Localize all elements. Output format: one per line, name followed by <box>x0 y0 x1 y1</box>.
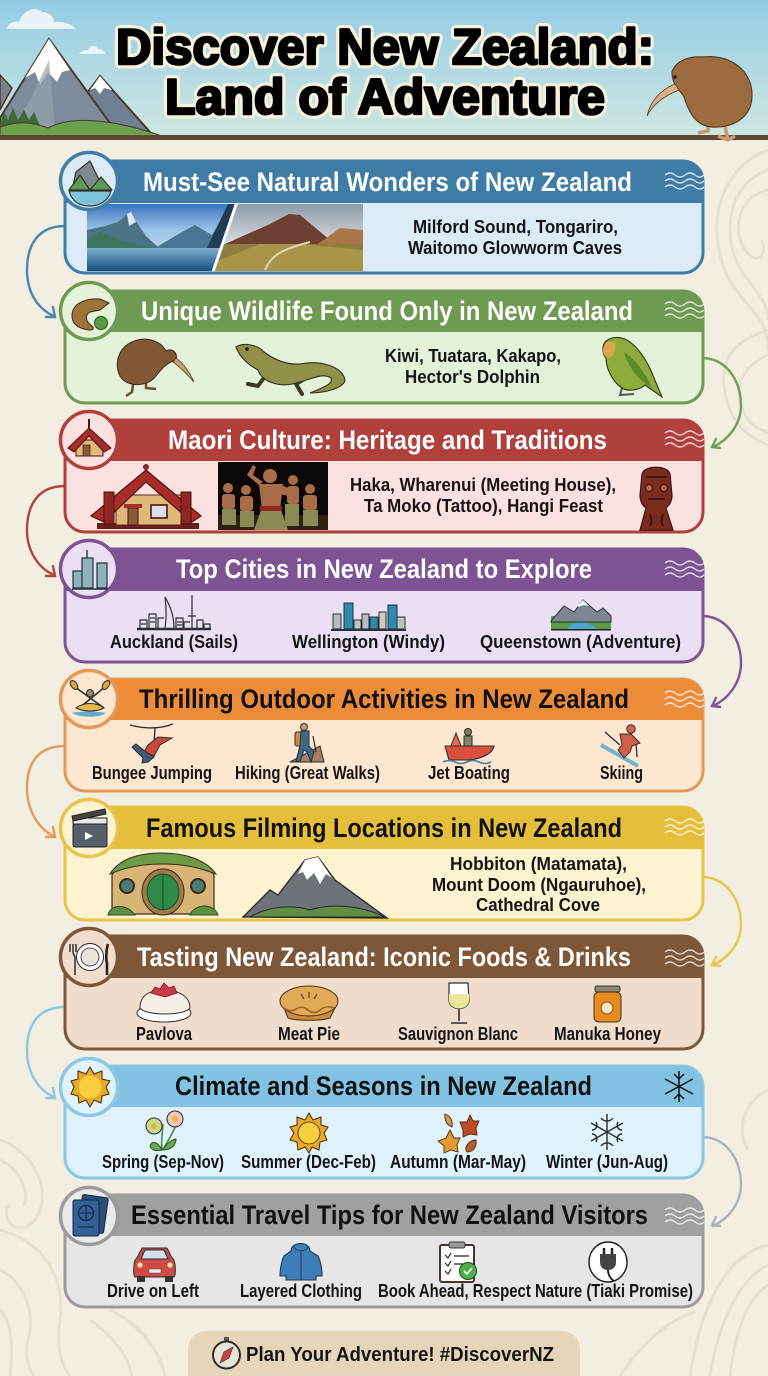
heading: Famous Filming Locations in New Zealand <box>146 813 622 843</box>
label: Skiing <box>600 762 643 783</box>
arrow: food to climate <box>27 1007 65 1098</box>
icon: pavlova <box>137 983 191 1022</box>
icon badge: passports <box>60 1188 118 1244</box>
icon: snowy mountains and hills <box>0 39 162 136</box>
title: Discover New Zealand: <box>116 19 654 75</box>
photo: haka performers <box>218 462 328 530</box>
label: Pavlova <box>136 1023 193 1044</box>
label: Bungee Jumping <box>92 762 212 783</box>
title: Discover New Zealand: <box>116 19 654 75</box>
body text: Milford Sound, Tongariro, <box>413 216 618 237</box>
icon badge: plate and cutlery <box>60 928 118 986</box>
label: Auckland (Sails) <box>110 631 238 652</box>
label: Meat Pie <box>278 1023 340 1044</box>
title: Land of Adventure <box>165 69 605 125</box>
icon: Auckland skyline <box>137 595 211 629</box>
connector arrows <box>27 226 741 1226</box>
label: Wellington (Windy) <box>292 631 445 652</box>
panel: top cities <box>60 540 704 662</box>
label: Hiking (Great Walks) <box>235 762 380 783</box>
label: Jet Boating <box>428 762 510 783</box>
icon badge: clapperboard <box>60 800 118 856</box>
arrow: activities to filming <box>27 746 65 837</box>
wave ornament <box>665 950 704 966</box>
icon: Queenstown lake and mountains <box>551 600 611 630</box>
icon: clouds <box>7 9 106 54</box>
body text: Waitomo Glowworm Caves <box>408 237 622 258</box>
arrow: wonders to wildlife <box>27 226 65 317</box>
icon: spring flowers <box>146 1111 183 1151</box>
footer text: Plan Your Adventure! #DiscoverNZ <box>246 1344 554 1366</box>
icon: hiker <box>290 724 324 762</box>
icon: summer sun <box>290 1113 328 1153</box>
icon: Wellington skyline <box>331 603 406 630</box>
panel: Maori culture <box>60 412 704 532</box>
body text: Cathedral Cove <box>476 894 600 915</box>
body text: Hobbiton (Matamata), <box>450 853 627 874</box>
heading: Essential Travel Tips for New Zealand Visitors <box>131 1200 648 1230</box>
icon: meat pie <box>280 986 338 1020</box>
label: Autumn (Mar-May) <box>390 1151 526 1172</box>
arrow: cities to activities <box>704 616 741 707</box>
icon: jet boat <box>443 728 494 764</box>
arrow: wildlife to culture <box>704 358 741 448</box>
body text <box>408 216 622 258</box>
icon: wharenui meeting house <box>91 464 201 529</box>
icon: bungee jumper <box>130 724 173 763</box>
photo: Tongariro <box>215 204 363 272</box>
band <box>0 135 768 140</box>
icon: wine glass <box>449 983 469 1023</box>
label: Spring (Sep-Nov) <box>102 1151 224 1172</box>
wave ornament <box>665 691 704 707</box>
title <box>116 19 654 125</box>
wave ornament <box>665 561 704 577</box>
icon: tuatara <box>236 345 345 394</box>
icon badge: mountains <box>60 152 118 210</box>
heading: Climate and Seasons in New Zealand <box>175 1071 592 1101</box>
heading: Maori Culture: Heritage and Traditions <box>168 425 607 455</box>
label: Winter (Jun-Aug) <box>546 1151 668 1172</box>
icon: kakapo <box>603 338 662 397</box>
icon badge: city <box>60 540 118 598</box>
label: Manuka Honey <box>554 1023 662 1044</box>
icon: hobbit hole <box>108 853 218 915</box>
panel: travel tips <box>60 1188 704 1307</box>
arrow: climate to tips <box>704 1137 741 1226</box>
label: Summer (Dec-Feb) <box>241 1151 376 1172</box>
icon: compass <box>213 1337 240 1368</box>
heading: Thrilling Outdoor Activities in New Zealand <box>139 684 629 714</box>
body text: Haka, Wharenui (Meeting House), <box>350 474 616 495</box>
body text: Mount Doom (Ngauruhoe), <box>432 874 646 895</box>
label: Sauvignon Blanc <box>398 1023 518 1044</box>
panel: foods and drinks <box>60 928 704 1049</box>
label: Drive on Left <box>107 1280 199 1301</box>
icon: manuka honey jar <box>594 986 621 1022</box>
body text: Hector's Dolphin <box>405 366 540 387</box>
wave ornament <box>665 819 704 835</box>
icon: checklist clipboard <box>440 1242 476 1282</box>
wave ornament <box>665 173 704 189</box>
icon: skier <box>601 725 640 766</box>
arrow: culture to cities <box>27 486 65 576</box>
panel: filming locations <box>60 800 704 920</box>
wave ornament <box>665 1208 704 1224</box>
heading: Tasting New Zealand: Iconic Foods & Drinks <box>137 942 631 972</box>
icon badge: meeting house <box>60 412 118 468</box>
footer call to action <box>188 1331 580 1376</box>
panel: outdoor activities <box>60 670 704 791</box>
icon: power plug <box>589 1242 627 1282</box>
wave ornament <box>665 431 704 447</box>
heading: Must-See Natural Wonders of New Zealand <box>143 167 632 197</box>
icon: tiki carving <box>640 467 673 530</box>
label: Book Ahead, Respect Nature (Tiaki Promise) <box>378 1280 693 1301</box>
icon: autumn leaves <box>438 1114 479 1153</box>
icon: snowflake <box>665 1071 693 1102</box>
heading: Top Cities in New Zealand to Explore <box>176 554 592 584</box>
arrow: filming to food <box>704 877 741 966</box>
header banner <box>0 0 768 140</box>
icon badge: tuatara and fern <box>60 282 118 340</box>
icon: Mount Doom <box>243 857 387 918</box>
title: Land of Adventure <box>165 69 605 125</box>
icon: red car <box>134 1248 175 1282</box>
icon: winter snowflake <box>591 1114 623 1150</box>
body text <box>385 345 561 387</box>
wave ornament <box>665 302 704 318</box>
icon: layered jacket <box>280 1244 322 1280</box>
icon: header kiwi <box>647 57 752 140</box>
body text <box>432 853 646 915</box>
body text: Ta Moko (Tattoo), Hangi Feast <box>364 495 603 516</box>
heading: Unique Wildlife Found Only in New Zealand <box>141 296 633 326</box>
label: Layered Clothing <box>240 1280 362 1301</box>
panel: unique wildlife <box>60 282 704 403</box>
icon badge: kayak <box>60 670 118 728</box>
icon badge: sun <box>60 1058 118 1116</box>
panel: natural wonders <box>60 152 704 273</box>
label: Queenstown (Adventure) <box>480 631 681 652</box>
body text: Kiwi, Tuatara, Kakapo, <box>385 345 561 366</box>
panel: climate and seasons <box>60 1058 703 1178</box>
icon: kiwi <box>117 339 194 396</box>
photo: Milford Sound <box>87 204 240 272</box>
body text <box>350 474 616 516</box>
